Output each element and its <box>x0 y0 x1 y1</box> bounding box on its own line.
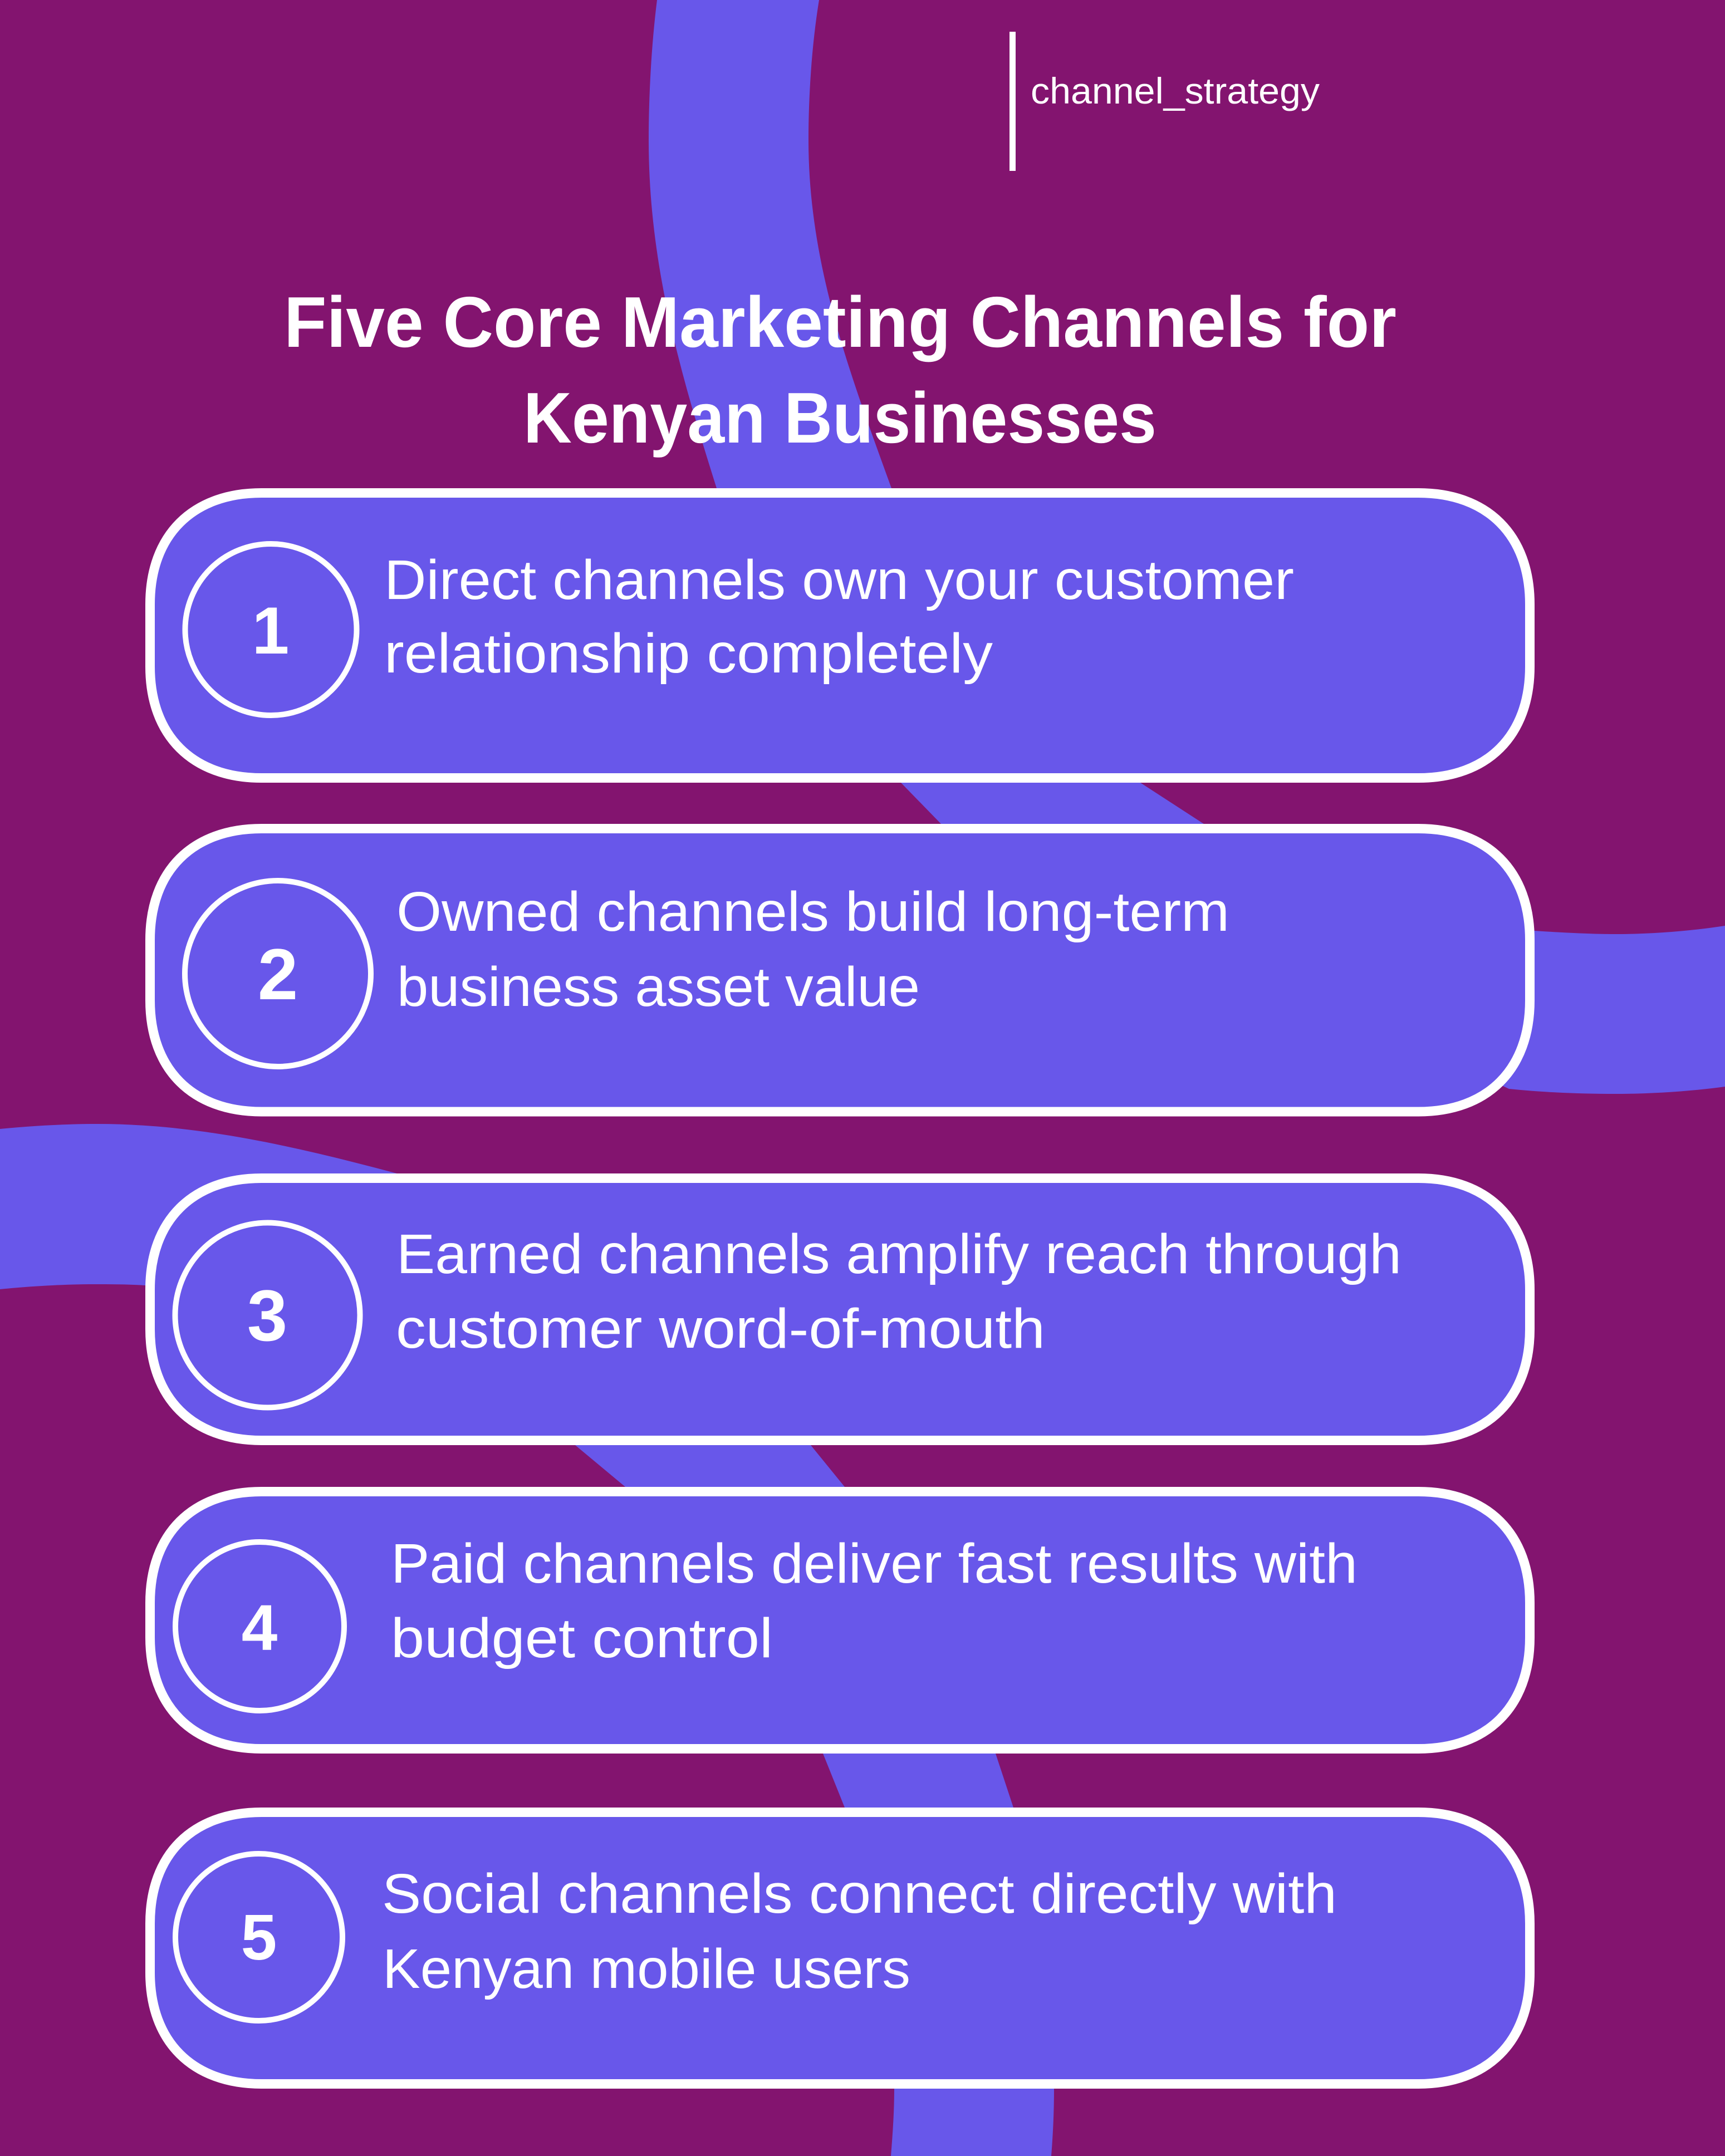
handle text: channel_strategy <box>1031 70 1320 111</box>
card background <box>150 1813 1530 2084</box>
card background <box>150 493 1530 778</box>
item text: Social channels connect directly with <box>382 1863 1337 1925</box>
item text: relationship completely <box>384 622 993 685</box>
item text <box>384 549 1294 685</box>
item text: customer word-of-mouth <box>396 1298 1045 1360</box>
number badge 1: 1 <box>252 593 289 668</box>
item text <box>382 1863 1337 2000</box>
panel: item 4 paid channels <box>150 1492 1530 1749</box>
item text: Kenyan mobile users <box>383 1938 910 2000</box>
panel: item 5 social channels <box>150 1813 1530 2084</box>
number badge 3 <box>175 1222 360 1407</box>
item text: Paid channels deliver fast results with <box>391 1533 1358 1595</box>
number badge 4 <box>175 1542 344 1711</box>
title: Kenyan Businesses <box>523 378 1156 458</box>
item text <box>396 1223 1401 1360</box>
item text <box>396 881 1229 1018</box>
item text: budget control <box>391 1607 773 1669</box>
decorative band: top ribbon curving to right edge <box>649 0 1725 1094</box>
number badge 2: 2 <box>258 934 298 1015</box>
card background <box>150 828 1530 1112</box>
item text: business asset value <box>397 956 920 1018</box>
number badge 5: 5 <box>241 1901 277 1973</box>
item text: Direct channels own your customer <box>384 549 1294 611</box>
panel: item 3 earned channels <box>150 1178 1530 1441</box>
number badge 5 <box>175 1854 342 2021</box>
card background <box>150 1178 1530 1441</box>
decorative band: lower ribbon from left edge to bottom <box>0 1124 1054 2156</box>
number badge 3: 3 <box>247 1275 287 1356</box>
item text: Earned channels amplify reach through <box>396 1223 1401 1285</box>
title: Five Core Marketing Channels for <box>284 282 1396 362</box>
card background <box>150 1492 1530 1749</box>
number badge 2 <box>185 881 371 1067</box>
header tag <box>1009 32 1320 171</box>
divider line <box>1009 32 1016 171</box>
panel: item 2 owned channels <box>150 828 1530 1112</box>
number badge 1 <box>185 544 356 715</box>
panel: item 1 direct channels <box>150 493 1530 778</box>
item text: Owned channels build long-term <box>396 881 1229 943</box>
item text <box>391 1533 1358 1669</box>
title <box>284 282 1396 458</box>
number badge 4: 4 <box>242 1592 277 1664</box>
